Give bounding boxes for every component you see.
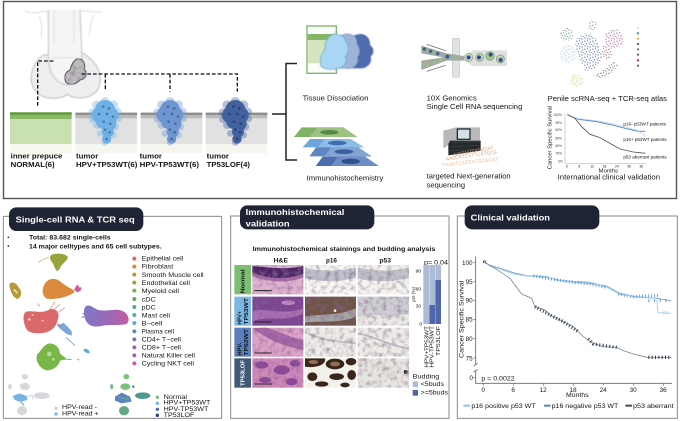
chart: international survival curves: p16+ p53WT patients xyxy=(623,137,667,142)
label: HPV+ group: HPV+TP53WT(6) xyxy=(76,162,137,169)
chart: survival curves: Cancer Specific Survival xyxy=(459,281,465,358)
row labels: TP53WT xyxy=(244,328,250,356)
chart: budding stacked bars: 0 xyxy=(419,322,422,328)
row labels: TP53WT xyxy=(244,297,250,325)
label: TP53LOF group: tumor xyxy=(207,153,229,160)
label: HPV- group: HPV-TP53WT(6) xyxy=(140,162,199,169)
heading: Single-cell RNA & TCR seq xyxy=(16,215,135,225)
chart: international survival curves: 80% xyxy=(555,144,562,148)
chart: survival curves: 6 xyxy=(511,387,515,394)
column headings xyxy=(274,258,391,265)
summary bullets: 14 major celltypes and 65 cell subtypes. xyxy=(29,244,162,250)
chart: UMAP by HPV read xyxy=(8,374,50,415)
legend: cell types: Cycling NKT cell xyxy=(142,362,194,368)
chart: survival curves: 30 xyxy=(630,387,637,394)
chart: international survival curves: 12 xyxy=(590,165,594,169)
label: targeted NGS xyxy=(427,174,511,189)
chart: atlas scatter clusters xyxy=(560,20,639,87)
icon: immunohistochemistry slides xyxy=(294,127,379,166)
chart: survival curves: 24 xyxy=(600,387,607,394)
legend: HPV read xyxy=(54,405,99,418)
chart: budding stacked bars: 90 xyxy=(416,269,421,275)
label: normal group: inner prepuce xyxy=(11,153,62,160)
legend: molecular group: HPV-TP53WT xyxy=(164,407,209,413)
column headings: p53 xyxy=(379,258,391,265)
legend: cell types: Epithelial cell xyxy=(142,257,183,263)
label: immunohistochemistry: Immunohistochemistry xyxy=(307,176,384,183)
icon: 10X microfluidic chip xyxy=(421,38,507,77)
heading: validation xyxy=(246,218,290,228)
panel: immunohistochemical validation xyxy=(231,205,449,418)
chart: UMAP by molecular group xyxy=(110,374,150,415)
heading: Clinical validation xyxy=(471,213,550,223)
panel: single-cell RNA and TCR seq xyxy=(3,207,222,419)
chart: international survival curves: 95% xyxy=(555,121,562,125)
legend: molecular group xyxy=(156,395,211,419)
chart: international survival curves: 6 xyxy=(578,165,580,169)
legend: budding: >=5buds xyxy=(421,391,448,397)
column headings: p16 xyxy=(326,258,337,265)
chart: budding stacked bars xyxy=(411,260,449,368)
chart: survival curves: 0 xyxy=(481,387,485,394)
icon: sequencer: TAAGTCATCATGCGCAT xyxy=(441,157,499,169)
chart: survival curves: 90 xyxy=(466,298,473,305)
label: normal group xyxy=(11,153,62,169)
chart: budding stacked bars: HPV-TP53WT xyxy=(430,325,436,368)
chart: survival curves: 12 xyxy=(540,387,547,394)
legend: cell types: pDC xyxy=(142,305,156,311)
label: atlas: Penile scRNA-seq + TCR-seq atlas xyxy=(548,96,668,103)
legend: molecular group: TP53LOF xyxy=(164,413,195,419)
image grid: H&E stains xyxy=(252,265,303,388)
tissue: HPV- tumor xyxy=(141,97,202,153)
label: 10X Genomics: Single Cell RNA sequencing xyxy=(427,104,522,111)
legend: HPV read: HPV-read + xyxy=(62,412,99,418)
column headings: H&E xyxy=(274,258,289,265)
legend: HPV read: HPV-read - xyxy=(62,405,97,411)
label: TP53LOF group xyxy=(207,153,250,169)
heading: Immunohistochemical xyxy=(246,207,344,217)
icon: anatomy with tumor xyxy=(25,10,237,106)
legend: survival groups: p16 negative p53 WT xyxy=(552,404,619,410)
tissue: normal xyxy=(10,112,72,153)
icon: sequencer xyxy=(441,127,499,169)
chart: UMAP of cell types xyxy=(9,254,129,370)
legend: budding: <5buds xyxy=(421,382,444,388)
legend: budding xyxy=(413,374,448,397)
label: HPV- group: tumor xyxy=(140,153,162,160)
legend: cell types: Myeloid cell xyxy=(142,289,179,295)
label: targeted NGS: sequencing xyxy=(427,182,465,189)
summary bullets: Total: 83.682 single-cells xyxy=(29,235,111,241)
chart: international survival curves: 0 xyxy=(566,165,568,169)
label: clinical validation: International clinical validation xyxy=(558,175,660,182)
row labels xyxy=(234,265,251,388)
chart: international survival curves: 75% xyxy=(555,151,562,155)
row labels: Normal xyxy=(241,269,247,293)
legend: cell types: CD4+ T−cell xyxy=(142,338,181,344)
legend: cell types: CD8+ T−cell xyxy=(142,346,181,352)
sampling illustration and tissue groups xyxy=(10,10,267,169)
legend: cell types: Endothelial cell xyxy=(142,281,190,287)
row labels: HPV- xyxy=(237,342,243,356)
chart: international survival curves: 36 xyxy=(639,165,643,169)
legend: survival groups: p16 positive p53 WT xyxy=(471,404,536,410)
workflow methods and results xyxy=(294,20,668,189)
image grid: p53 stains xyxy=(358,265,409,388)
chart: international survival curves: p53 aberrant patients xyxy=(623,154,667,159)
chart: survival curves: 0 xyxy=(469,375,473,382)
legend: cell types: Mast cell xyxy=(142,313,170,319)
chart: international survival curves: 90% xyxy=(555,128,562,132)
label: HPV- group xyxy=(140,153,199,169)
chart: budding stacked bars: TP53LOF xyxy=(436,325,442,356)
chart: survival curves: 95 xyxy=(466,279,473,286)
legend: budding: Budding xyxy=(413,374,439,380)
row labels: HPV+ xyxy=(237,311,243,325)
chart: international survival curves: p16- p53WT patients xyxy=(623,121,666,126)
legend: cell types: Natural Killer cell xyxy=(142,354,195,360)
heading xyxy=(9,207,143,231)
chart title: Immunohistochemical stainings and budding analysis xyxy=(253,247,436,253)
chart: international survival curves: 24 xyxy=(615,165,619,169)
legend: cell types: Plasma cell xyxy=(142,329,174,335)
icon: tissue dissociation xyxy=(307,26,373,73)
label: HPV+ group xyxy=(76,153,137,169)
legend: molecular group: HPV+TP53WT xyxy=(164,401,211,407)
chart: survival curves: 36 xyxy=(660,387,667,394)
legend: cell types: Fibroblast xyxy=(142,265,174,271)
summary bullets xyxy=(7,235,162,250)
legend: survival groups xyxy=(463,404,674,410)
legend: survival groups: p53 aberrant xyxy=(633,404,674,410)
chart: survival curves xyxy=(459,257,672,399)
chart: international survival curves: 30 xyxy=(627,165,631,169)
tissue: HPV+ tumor xyxy=(75,97,137,153)
legend: cell types: Smooth Muscle cell xyxy=(142,273,204,279)
panel: study workflow overview xyxy=(4,2,676,198)
chart: survival curves: Months xyxy=(566,393,589,399)
chart: survival curves: p = 0.0022 xyxy=(481,376,515,383)
chart: budding stacked bars: HPV+TP53WT xyxy=(424,325,430,368)
label: tissue dissociation: Tissue Dissociation xyxy=(303,95,368,102)
chart: budding stacked bars: 60 xyxy=(416,287,421,293)
icon: sequencer: GCGTAATCATGCCAT xyxy=(454,145,494,159)
label: targeted NGS: targeted Next-generation xyxy=(427,174,511,181)
chart: survival curves: 18 xyxy=(570,387,577,394)
chart: international survival curves: 0% xyxy=(558,159,563,163)
chart: budding stacked bars: p= 0.04 xyxy=(424,260,449,266)
row labels: TP53LOF xyxy=(241,359,247,386)
chart: survival curves: 85 xyxy=(466,317,473,324)
icon: sequencer: AAGCATCATTCATGCG xyxy=(445,150,497,163)
chart: international survival curves: 85% xyxy=(555,136,562,140)
chart: international survival curves: 100% xyxy=(553,113,562,117)
tissue: TP53LOF tumor xyxy=(206,97,267,153)
label: normal group: NORMAL(6) xyxy=(11,162,55,169)
chart: budding stacked bars: pct (%) xyxy=(411,286,416,302)
legend: cell types xyxy=(132,257,204,368)
chart: survival curves: 80 xyxy=(466,336,473,343)
legend: molecular group: Normal xyxy=(164,395,187,401)
workflow bracket xyxy=(272,64,297,160)
legend: cell types: B−cell xyxy=(142,321,162,327)
chart: international survival curves: Months xyxy=(599,169,618,175)
chart: budding stacked bars: 30 xyxy=(416,304,421,310)
label: HPV+ group: tumor xyxy=(76,153,99,160)
chart: international survival curves: Cancer Specific Survival xyxy=(547,106,553,169)
legend: cell types: cDC xyxy=(142,297,156,303)
heading xyxy=(240,205,374,229)
chart: international survival curves: 18 xyxy=(603,165,607,169)
chart: international survival curves xyxy=(547,106,667,175)
chart: survival curves: 100 xyxy=(462,260,473,267)
label: 10X Genomics: 10X Genomics xyxy=(427,95,477,102)
label: 10X Genomics xyxy=(427,95,522,111)
image grid: p16 stains xyxy=(305,265,356,388)
label: TP53LOF group: TP53LOF(4) xyxy=(207,162,250,169)
panel: clinical validation xyxy=(457,205,677,418)
chart: survival curves: 75 xyxy=(466,355,473,362)
heading xyxy=(465,205,599,229)
